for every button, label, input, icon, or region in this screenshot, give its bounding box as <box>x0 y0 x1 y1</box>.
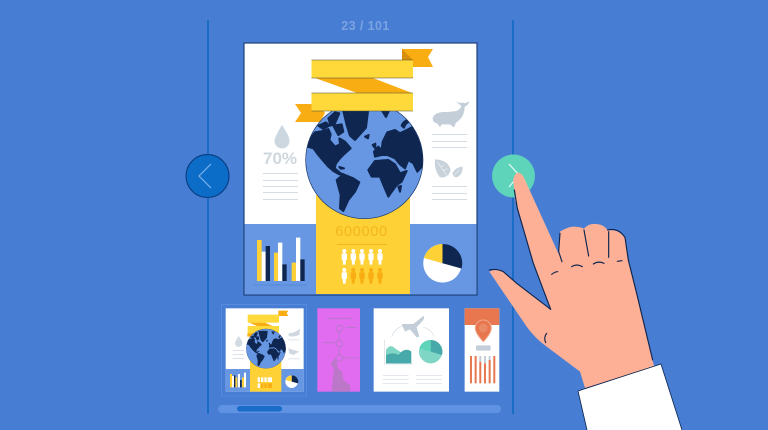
right text lines upper <box>432 134 467 148</box>
bar chart <box>253 238 307 285</box>
ribbon left tail <box>295 104 325 122</box>
next button <box>492 154 535 198</box>
hand pointing at next button <box>489 173 682 430</box>
right rail line <box>512 20 514 414</box>
ribbon lower band <box>312 93 413 111</box>
ribbon upper band <box>312 60 413 78</box>
pie chart <box>423 244 462 283</box>
people pictogram <box>342 249 383 284</box>
lower blue band <box>244 224 476 294</box>
ribbon top tail <box>402 49 433 67</box>
left rail line <box>207 20 209 414</box>
globe <box>305 101 425 219</box>
thumbnail 1: world infographic <box>222 305 307 396</box>
thumbnail 4: map pin infographic <box>465 308 499 392</box>
divider under number <box>337 244 387 245</box>
thumbnail 3: travel infographic <box>374 308 449 392</box>
infographic viewer illustration <box>185 20 682 430</box>
icon: leaves <box>435 159 463 177</box>
thumbnail 2: pink liberty infographic <box>317 308 360 392</box>
left text lines <box>263 173 298 200</box>
icon: whale <box>433 101 469 127</box>
ribbon fold <box>315 78 412 93</box>
icon: water drop <box>274 125 290 149</box>
main infographic page <box>244 43 477 295</box>
shirt cuff <box>578 364 682 430</box>
previous button <box>186 154 229 198</box>
right text lines lower <box>432 186 467 200</box>
page counter: 23 / 101 <box>341 19 390 33</box>
600000 label: 600000 <box>335 224 388 240</box>
scrollbar <box>218 405 501 413</box>
hand contour lines <box>489 190 653 389</box>
cuff outline <box>578 364 682 430</box>
yellow column <box>316 195 410 294</box>
ribbon tail fold shade <box>402 49 413 60</box>
70% label: 70% <box>263 149 297 168</box>
hand shape <box>489 173 660 393</box>
thumbnail strip <box>222 305 499 396</box>
